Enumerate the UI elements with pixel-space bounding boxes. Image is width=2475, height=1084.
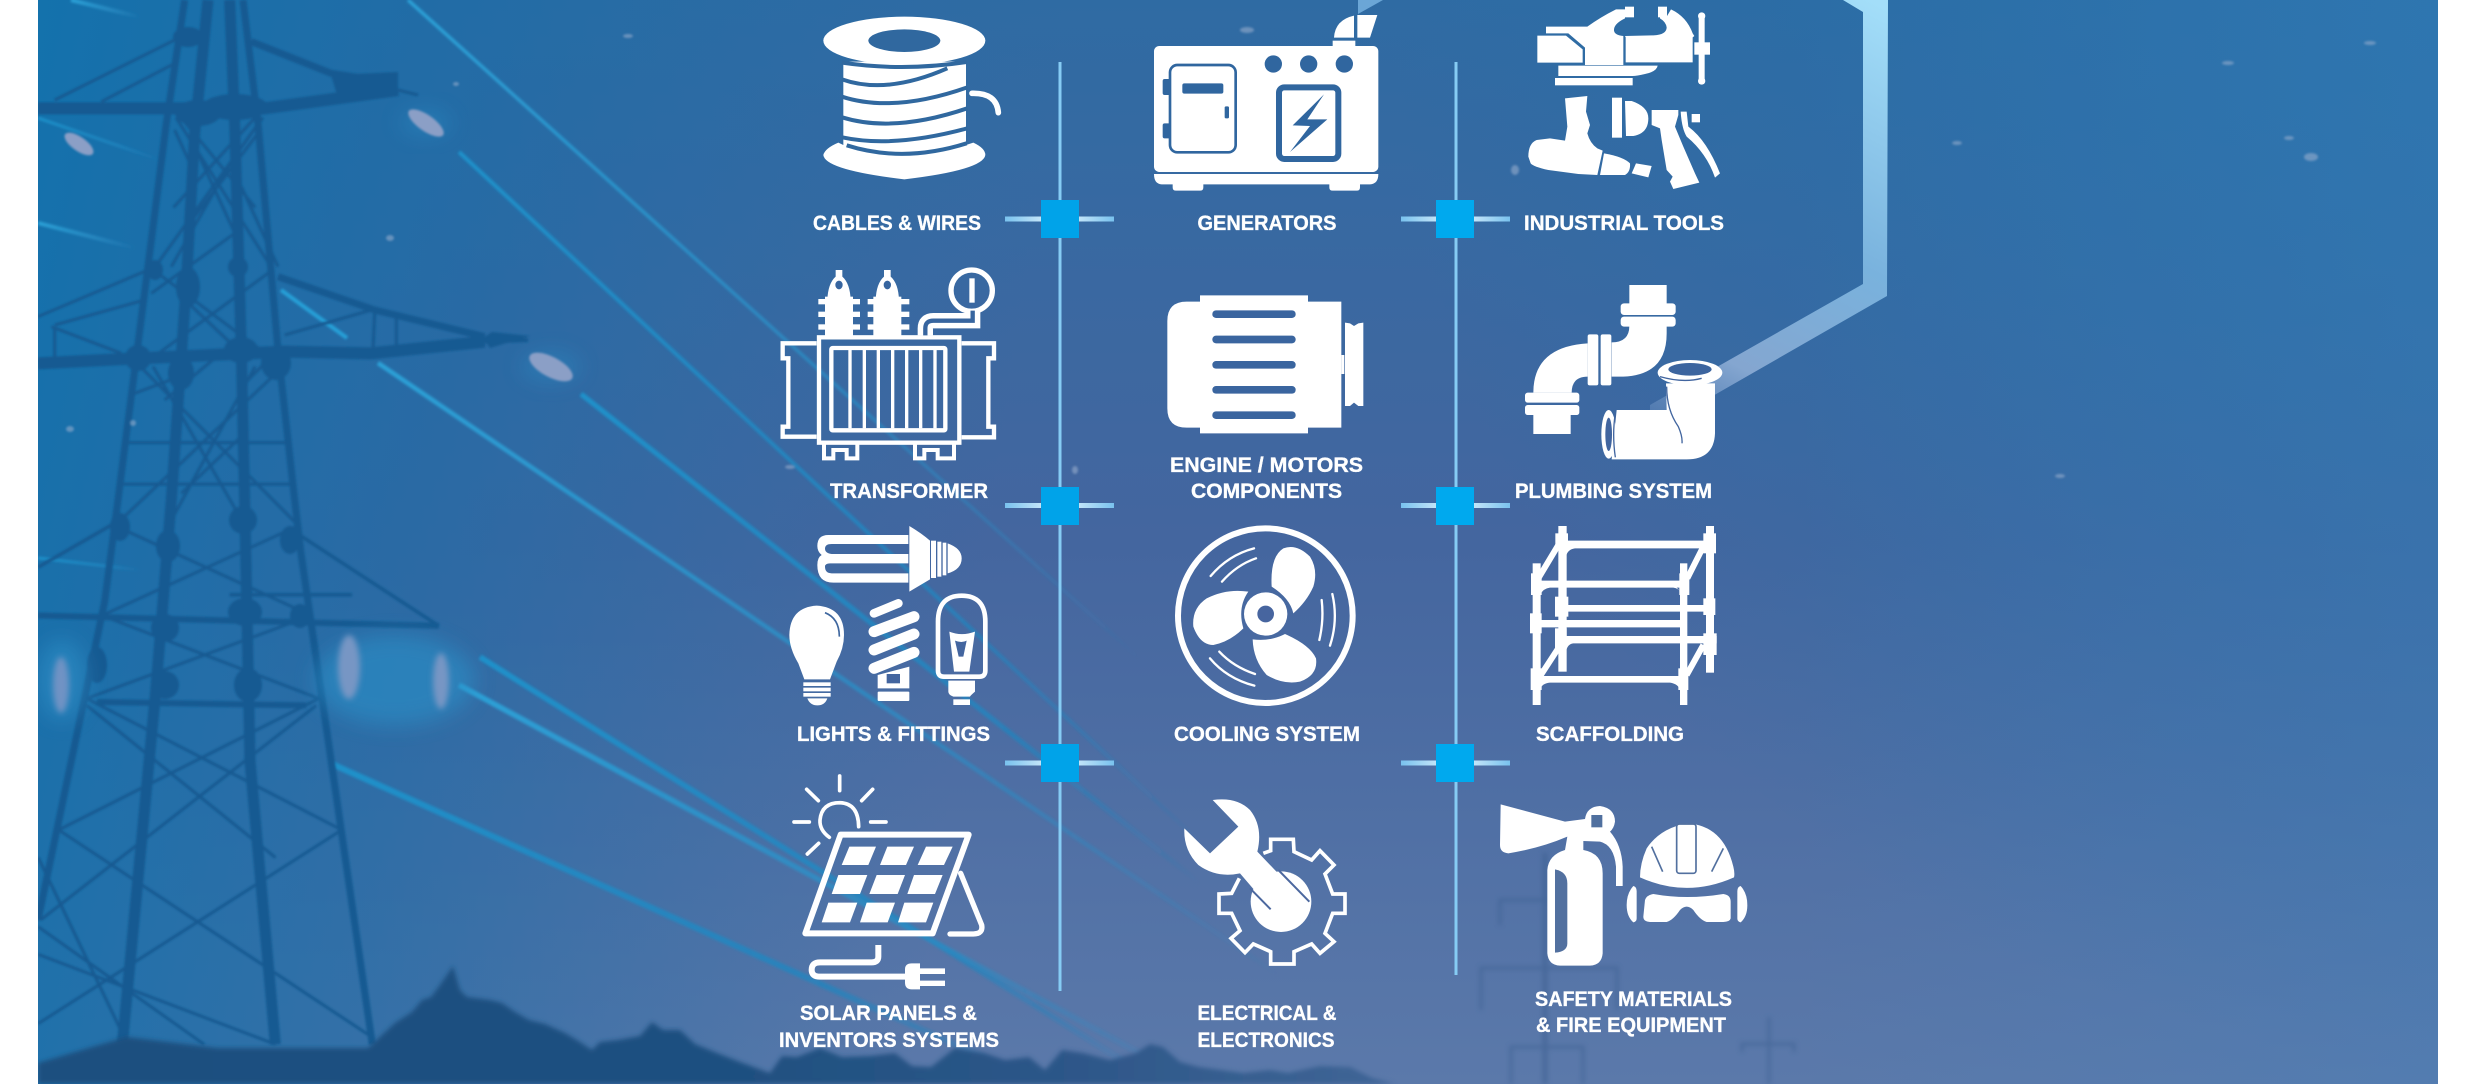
label: solar panels and inverters systems: INVENTORS SYSTEMS (779, 1029, 999, 1052)
decorative hexagon frame (1358, 0, 1888, 432)
icon: industrial tools (1528, 7, 1720, 189)
label: safety materials and fire equipment: SAFETY MATERIALS (1535, 988, 1732, 1011)
label: scaffolding: SCAFFOLDING (1536, 723, 1684, 746)
icon: wrench and gear (1184, 799, 1345, 964)
label: engine and motors components (1170, 454, 1363, 503)
ground and treeline (38, 966, 1395, 1084)
label: engine and motors components: ENGINE / MOTORS (1170, 454, 1363, 477)
icon: scaffolding (1530, 526, 1717, 705)
icon: cooling fan (1178, 528, 1353, 703)
label: plumbing system: PLUMBING SYSTEM (1515, 480, 1712, 503)
label: engine and motors components: COMPONENTS (1191, 480, 1342, 503)
icon: transformer (783, 270, 994, 458)
label: transformer: TRANSFORMER (830, 480, 988, 503)
label: electrical and electronics: ELECTRONICS (1198, 1029, 1334, 1052)
distant pylons (1481, 853, 1794, 1084)
label: electrical and electronics (1198, 1002, 1336, 1052)
icon: lights (789, 526, 985, 705)
icon: electric motor (1167, 295, 1363, 433)
label: lights and fittings: LIGHTS & FITTINGS (797, 723, 990, 746)
label: solar panels and inverters systems: SOLAR PANELS & (800, 1002, 977, 1025)
label: cooling system: COOLING SYSTEM (1174, 723, 1360, 746)
label: solar panels and inverters systems (779, 1002, 999, 1052)
label: generators: GENERATORS (1198, 212, 1336, 235)
insulator glows (38, 104, 581, 725)
label: safety materials and fire equipment: & FIRE EQUIPMENT (1536, 1014, 1726, 1037)
icon: plumbing pipes (1525, 285, 1722, 459)
icon: cable spool (823, 17, 998, 179)
icon: generator (1154, 15, 1378, 191)
label: cables and wires: CABLES & WIRES (813, 212, 981, 235)
icon: fire extinguisher (1500, 804, 1623, 966)
power lines (38, 0, 1182, 1057)
transmission tower silhouette (38, 0, 530, 1044)
label: industrial tools: INDUSTRIAL TOOLS (1524, 212, 1724, 235)
label: safety materials and fire equipment (1535, 988, 1732, 1037)
icon: solar panel with sun and plug (794, 776, 982, 989)
icon: safety helmet and goggles (1627, 823, 1747, 922)
panel: column dividers with connector nodes (1005, 62, 1510, 991)
label: electrical and electronics: ELECTRICAL & (1198, 1002, 1336, 1025)
sky specks (66, 27, 2376, 478)
